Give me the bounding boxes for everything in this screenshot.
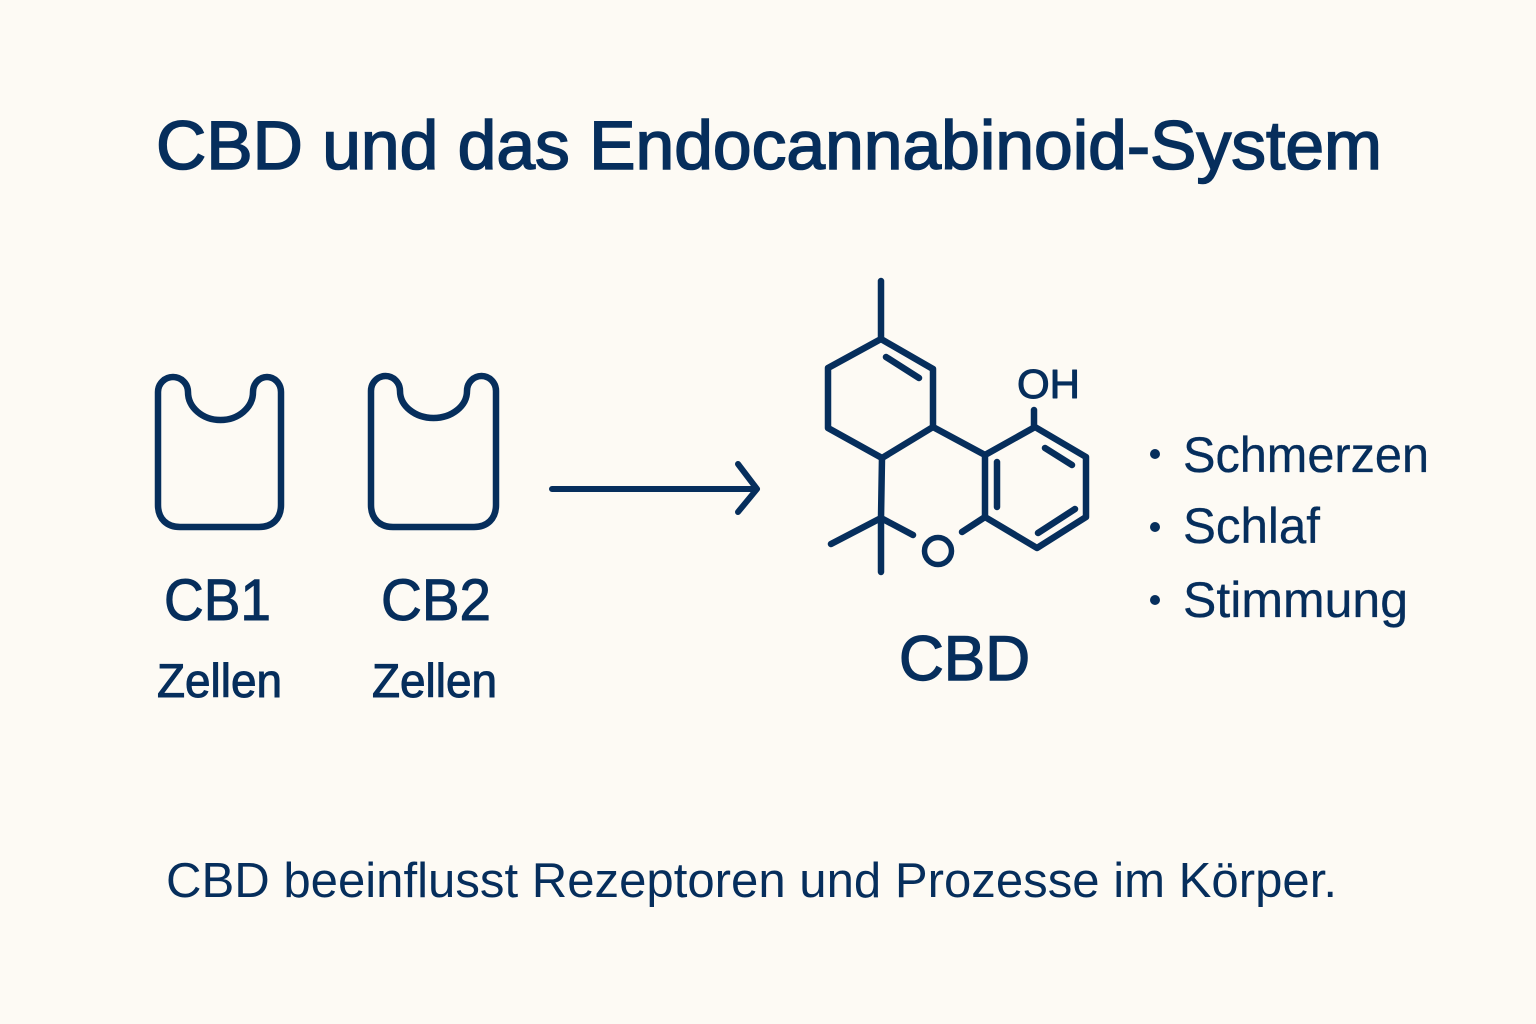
icon: CB2 receptor: [371, 376, 496, 527]
label: CBD: CBD: [899, 624, 1030, 694]
icon: CB1 receptor: [158, 377, 281, 527]
bullet: Stimmung: Stimmung: [1183, 572, 1408, 628]
caption: CBD beeinflusst Rezeptoren und Prozesse im Körper.: [166, 854, 1337, 908]
arrow: [552, 464, 757, 512]
label: OH: OH: [1017, 361, 1080, 407]
label: Zellen: Zellen: [372, 654, 497, 707]
list: effects: [1150, 427, 1429, 628]
bullet: Schlaf: Schlaf: [1183, 498, 1320, 554]
label: CB2: CB2: [381, 568, 491, 633]
title: CBD und das Endocannabinoid-System: [156, 107, 1382, 184]
receptor: CB1: [157, 377, 282, 707]
bullet: Schmerzen: Schmerzen: [1183, 427, 1429, 483]
label: CB1: CB1: [164, 568, 271, 633]
label: Zellen: Zellen: [157, 654, 282, 707]
receptor: CB2: [371, 376, 497, 707]
icon: CBD molecule: [828, 281, 1086, 572]
